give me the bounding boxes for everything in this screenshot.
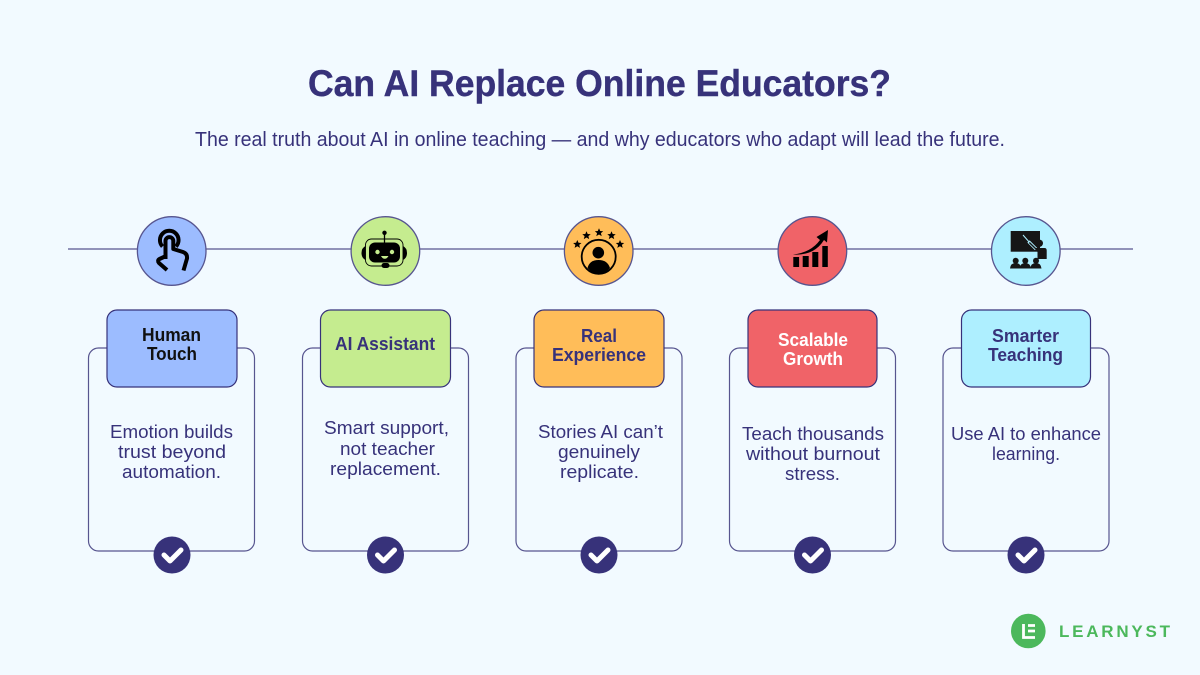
icon: growth chart bbox=[793, 230, 828, 267]
heading: scalable growth: Scalable bbox=[778, 330, 848, 350]
node: ai assistant bbox=[351, 217, 420, 285]
heading: smarter teaching: Smarter bbox=[992, 326, 1059, 346]
text: smarter teaching bbox=[951, 424, 1101, 464]
text: ai assistant: replacement. bbox=[330, 459, 441, 479]
card: real experience bbox=[516, 348, 682, 551]
text: ai assistant: Smart support, bbox=[324, 418, 449, 438]
card: smarter teaching bbox=[943, 348, 1109, 551]
card: scalable growth bbox=[730, 348, 896, 551]
icon: check badge bbox=[580, 536, 618, 574]
text: real experience: replicate. bbox=[560, 462, 639, 482]
title: Can AI Replace Online Educators? bbox=[308, 63, 891, 104]
icon: pointing hand bbox=[158, 231, 187, 270]
heading: human touch bbox=[142, 325, 201, 364]
tag: ai assistant bbox=[320, 310, 450, 387]
text: scalable growth: stress. bbox=[785, 464, 840, 484]
heading: smarter teaching: Teaching bbox=[988, 345, 1063, 365]
text: smarter teaching: learning. bbox=[992, 444, 1060, 464]
text: real experience: Stories AI can’t bbox=[538, 422, 663, 442]
icon: check badge bbox=[154, 536, 190, 574]
text: ai assistant: not teacher bbox=[340, 439, 435, 459]
text: human touch: trust beyond bbox=[118, 442, 226, 462]
panel: smarter teaching bbox=[943, 217, 1109, 573]
text: scalable growth bbox=[742, 424, 884, 484]
text: scalable growth: Teach thousands bbox=[742, 424, 884, 444]
text: human touch: automation. bbox=[122, 462, 221, 482]
logo: learnyst bbox=[1011, 614, 1171, 648]
tag: smarter teaching bbox=[962, 310, 1090, 387]
heading: real experience: Real bbox=[581, 326, 617, 346]
icon: robot bbox=[362, 231, 407, 268]
panel: human touch bbox=[88, 217, 254, 573]
icon: expert with stars bbox=[573, 228, 624, 274]
text: human touch: Emotion builds bbox=[110, 422, 233, 442]
card: ai assistant bbox=[302, 348, 468, 551]
heading: scalable growth bbox=[778, 330, 848, 369]
icon: teacher at board bbox=[1010, 231, 1047, 268]
icon: check badge bbox=[367, 536, 404, 574]
tag: human touch bbox=[107, 310, 237, 387]
tag: real experience bbox=[534, 310, 664, 387]
text: real experience: genuinely bbox=[558, 442, 640, 462]
text: real experience bbox=[538, 422, 663, 482]
node: human touch bbox=[137, 217, 206, 285]
subtitle: The real truth about AI in online teaching — and why educators who adapt will lead the future. bbox=[195, 129, 1005, 151]
text: human touch bbox=[110, 422, 233, 482]
logo wordmark: LEARNYST bbox=[1059, 622, 1171, 641]
tag: scalable growth bbox=[748, 310, 877, 387]
icon: learnyst mark bbox=[1011, 614, 1046, 648]
icon: check badge bbox=[794, 536, 831, 574]
card: human touch bbox=[88, 348, 254, 551]
heading: real experience bbox=[552, 326, 646, 365]
heading: ai assistant: AI Assistant bbox=[335, 334, 435, 354]
text: scalable growth: without burnout bbox=[745, 444, 880, 464]
node: real experience bbox=[564, 217, 633, 285]
panel: scalable growth bbox=[730, 217, 896, 573]
heading: real experience: Experience bbox=[552, 345, 646, 365]
heading: human touch: Touch bbox=[147, 344, 197, 364]
text: smarter teaching: Use AI to enhance bbox=[951, 424, 1101, 444]
heading: scalable growth: Growth bbox=[783, 349, 843, 369]
text: ai assistant bbox=[324, 418, 449, 479]
heading: human touch: Human bbox=[142, 325, 201, 345]
heading: smarter teaching bbox=[988, 326, 1063, 365]
node: smarter teaching bbox=[992, 217, 1060, 285]
panel: ai assistant bbox=[302, 217, 468, 573]
node: scalable growth bbox=[778, 217, 847, 285]
icon: check badge bbox=[1008, 536, 1044, 574]
panel: real experience bbox=[516, 217, 682, 573]
